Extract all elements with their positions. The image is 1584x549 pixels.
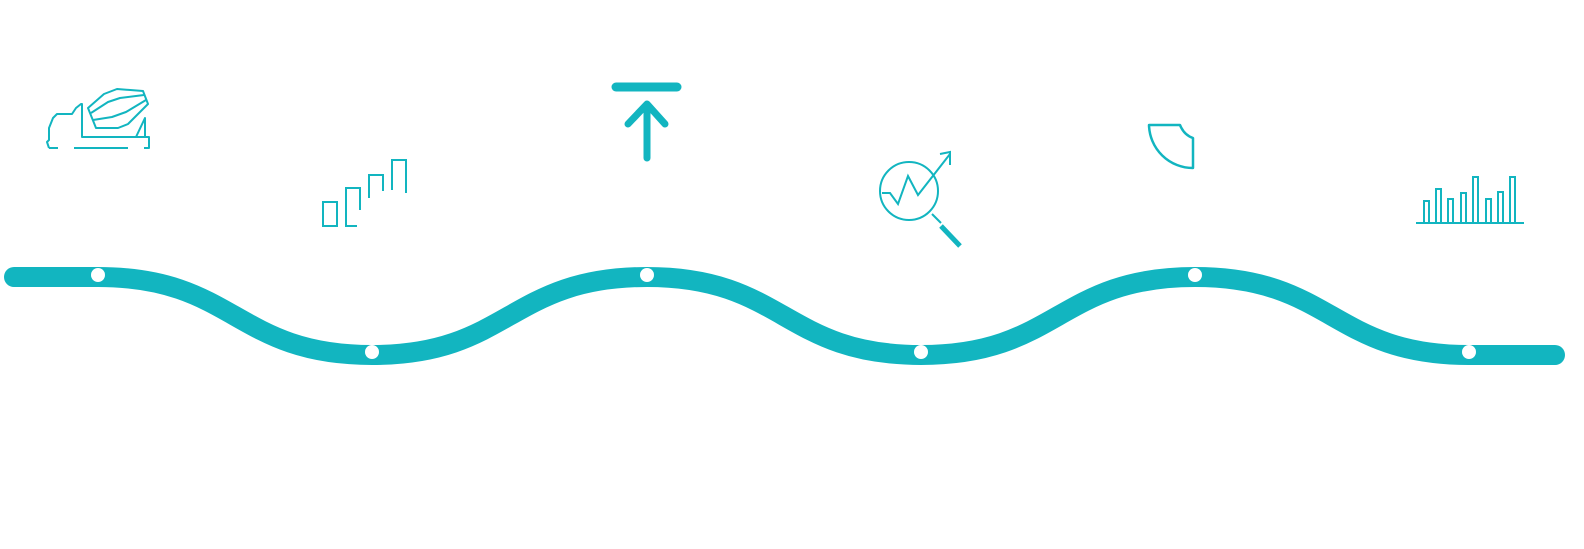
timeline wave [14, 268, 1555, 359]
icon: rising bar chart [323, 160, 406, 226]
icon: bar chart [1416, 177, 1524, 223]
icon: magnifier with trend [880, 152, 960, 246]
icon: vehicle with cargo [47, 89, 149, 148]
icon: upload arrow [616, 87, 677, 158]
icon: quarter circle [1149, 125, 1193, 168]
